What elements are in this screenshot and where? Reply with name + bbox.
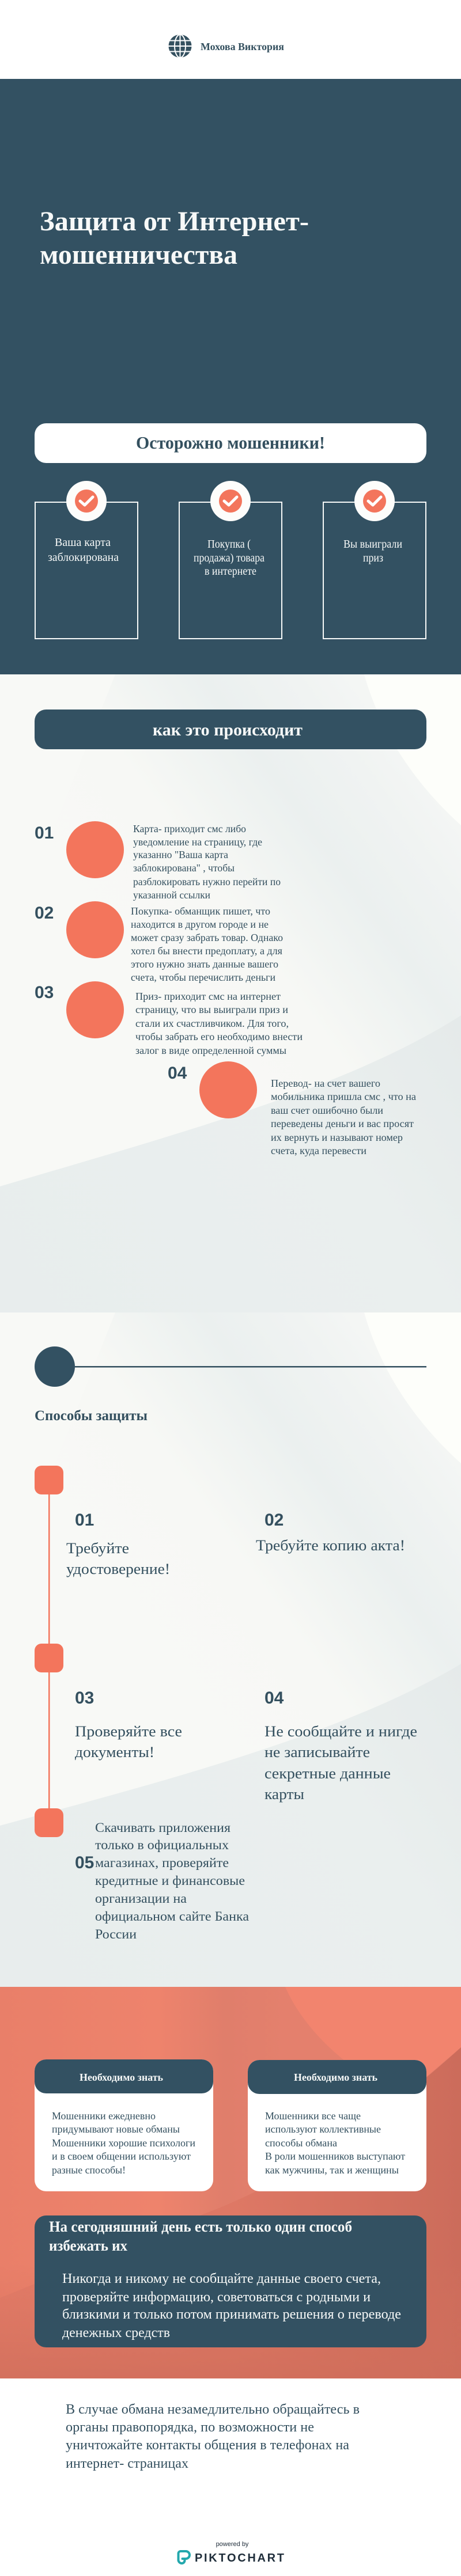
step 04: мобильника пришла смс , что на xyxy=(271,1091,416,1102)
icon: globe xyxy=(168,35,191,58)
tip 05: официальном сайте Банка xyxy=(95,1909,249,1924)
step 04: переведены деньги и вас просят xyxy=(271,1118,414,1129)
card: need to know 2: как мужчины, так и женщины xyxy=(265,2164,399,2176)
card: need to know 1 xyxy=(35,2059,213,2191)
card: need to know 1: Мошенники ежедневно xyxy=(52,2110,156,2122)
tip 02: 02 xyxy=(264,1511,284,1530)
step 03: залог в виде определенной суммы xyxy=(135,1045,286,1056)
panel: the only way: На сегодняшний день есть только один способ xyxy=(49,2218,352,2235)
closing note: органы правопорядка, по возможности не xyxy=(66,2420,314,2435)
card: prize xyxy=(323,481,426,639)
tip 05: только в официальных xyxy=(95,1838,229,1852)
tip 04: не записывайте xyxy=(264,1743,370,1761)
tip 01: Требуйте xyxy=(66,1539,129,1557)
step 03: чтобы забрать его необходимо внести xyxy=(135,1031,303,1042)
tip 04 xyxy=(264,1689,417,1803)
panel: the only way: близкими и только потом принимать решения о переводе xyxy=(62,2307,401,2322)
tip 03: Проверяйте все xyxy=(75,1723,182,1740)
step 01: 01 xyxy=(35,824,54,843)
banner: warning: Осторожно мошенники! xyxy=(136,433,325,453)
step 02: счета, чтобы перечислить деньги xyxy=(131,972,275,983)
section marker: circle and rule xyxy=(35,1346,426,1387)
card: need to know 2: Необходимо знать xyxy=(294,2072,377,2083)
card: need to know 2: Мошенники все чаще xyxy=(265,2110,361,2122)
step 04: их вернуть и называют номер xyxy=(271,1132,403,1143)
card: need to know 2: В роли мошенников выступают xyxy=(265,2150,405,2162)
step 02 xyxy=(35,901,283,983)
tip 03 xyxy=(75,1689,182,1761)
tip 01 xyxy=(66,1511,170,1577)
card: blocked card xyxy=(35,481,138,639)
step 01: Карта- приходит смс либо xyxy=(133,823,246,834)
step 02: Покупка- обманщик пишет, что xyxy=(131,905,270,917)
card: prize: приз xyxy=(363,552,383,564)
tip 05: России xyxy=(95,1927,137,1941)
banner: how it happens: как это происходит xyxy=(153,720,303,739)
tip 05: организации на xyxy=(95,1891,187,1906)
tip 05: кредитные и финансовые xyxy=(95,1873,245,1888)
card: online purchase xyxy=(179,481,282,639)
powered by piktochart: PIKTOCHART xyxy=(195,2552,284,2564)
step 01 xyxy=(35,821,281,901)
panel: how it works background xyxy=(0,674,461,1312)
closing note: уничтожайте контакты общения в телефонах на xyxy=(66,2438,349,2453)
title: Защита от Интернет- xyxy=(40,206,309,237)
powered by piktochart xyxy=(179,2541,284,2564)
step 04: Перевод- на счет вашего xyxy=(271,1078,380,1089)
icon: piktochart logo xyxy=(179,2551,190,2563)
banner: how it happens xyxy=(35,710,426,749)
tip 05: Скачивать приложения xyxy=(95,1820,231,1835)
panel: hero xyxy=(0,79,461,674)
author name: Мохова Виктория xyxy=(201,41,284,52)
title: мошенничества xyxy=(40,240,237,270)
tip 01: удостоверение! xyxy=(66,1560,170,1577)
step 02: 02 xyxy=(35,904,54,923)
footer background xyxy=(0,2378,461,2576)
tip 04: карты xyxy=(264,1785,304,1803)
panel: the only way: денежных средств xyxy=(62,2325,170,2340)
step 01: заблокирована" , чтобы xyxy=(133,862,235,874)
panel: the only way: проверяйте информацию, советоваться с родными и xyxy=(62,2290,371,2305)
timeline xyxy=(35,1466,63,1837)
tip 05: 05 xyxy=(75,1853,94,1872)
tip 01: 01 xyxy=(75,1511,94,1530)
step 04 xyxy=(168,1061,416,1156)
step 03: стали их счастливчиком. Для того, xyxy=(135,1018,289,1029)
card: need to know 1: разные способы! xyxy=(52,2164,126,2176)
card: need to know 2 xyxy=(248,2060,426,2191)
card: need to know 1: и в своем общении используют xyxy=(52,2150,191,2162)
card: online purchase: в интернете xyxy=(205,565,256,578)
step 03: Приз- приходит смс на интернет xyxy=(135,991,281,1002)
tip 04: 04 xyxy=(264,1689,284,1708)
step 04: ваш счет ошибочно были xyxy=(271,1105,383,1116)
step 02: может сразу забрать товар. Однако xyxy=(131,932,283,943)
closing note xyxy=(66,2402,360,2471)
tip 05 xyxy=(75,1820,249,1941)
card: need to know 1: Мошенники хорошие психологи xyxy=(52,2137,195,2149)
tip 02: Требуйте копию акта! xyxy=(256,1537,405,1554)
powered by piktochart: powered by xyxy=(216,2541,249,2548)
heading: ways to protect: Способы защиты xyxy=(35,1408,148,1424)
tip 02 xyxy=(256,1511,405,1554)
card: need to know 2: используют коллективные xyxy=(265,2123,381,2135)
step 01: указанной ссылки xyxy=(133,889,210,901)
panel: protection background xyxy=(0,1312,461,1987)
card: online purchase: Покупка ( xyxy=(207,538,251,551)
card: need to know 1: придумывают новые обманы xyxy=(52,2123,180,2135)
step 02: находится в другом городе и не xyxy=(131,919,269,930)
tip 04: секретные данные xyxy=(264,1765,391,1782)
panel: the only way: избежать их xyxy=(49,2237,127,2254)
closing note: В случае обмана незамедлительно обращайтесь в xyxy=(66,2402,360,2417)
card: online purchase: продажа) товара xyxy=(194,552,264,564)
step 03: страницу, что вы выиграли приз и xyxy=(135,1004,288,1015)
title xyxy=(40,206,309,270)
panel: coral background xyxy=(0,1987,461,2378)
closing note: интернет- страницах xyxy=(66,2456,188,2471)
step 03 xyxy=(35,981,303,1056)
card: need to know 1: Необходимо знать xyxy=(80,2072,163,2083)
tip 03: документы! xyxy=(75,1743,154,1761)
tip 04: Не сообщайте и нигде xyxy=(264,1723,417,1740)
header band xyxy=(0,0,461,79)
step 04: 04 xyxy=(168,1064,187,1083)
panel: the only way xyxy=(35,2215,426,2347)
banner: warning xyxy=(35,423,426,463)
step 02: этого нужно знать данные вашего xyxy=(131,958,278,970)
card: prize: Вы выиграли xyxy=(343,538,402,551)
card: need to know 2: способы обмана xyxy=(265,2137,337,2149)
tip 03: 03 xyxy=(75,1689,94,1708)
card: blocked card: заблокирована xyxy=(48,551,119,564)
step 01: разблокировать нужно перейти по xyxy=(133,876,281,887)
panel: the only way: Никогда и никому не сообщайте данные своего счета, xyxy=(62,2271,381,2286)
tip 05: магазинах, проверяйте xyxy=(95,1856,229,1870)
step 02: хотел бы внести предоплату, а для xyxy=(131,945,282,957)
step 03: 03 xyxy=(35,983,54,1002)
card: blocked card: Ваша карта xyxy=(55,536,111,549)
step 01: указанно "Ваша карта xyxy=(133,849,228,860)
step 01: уведомление на страницу, где xyxy=(133,836,262,848)
step 04: счета, куда перевести xyxy=(271,1145,366,1156)
